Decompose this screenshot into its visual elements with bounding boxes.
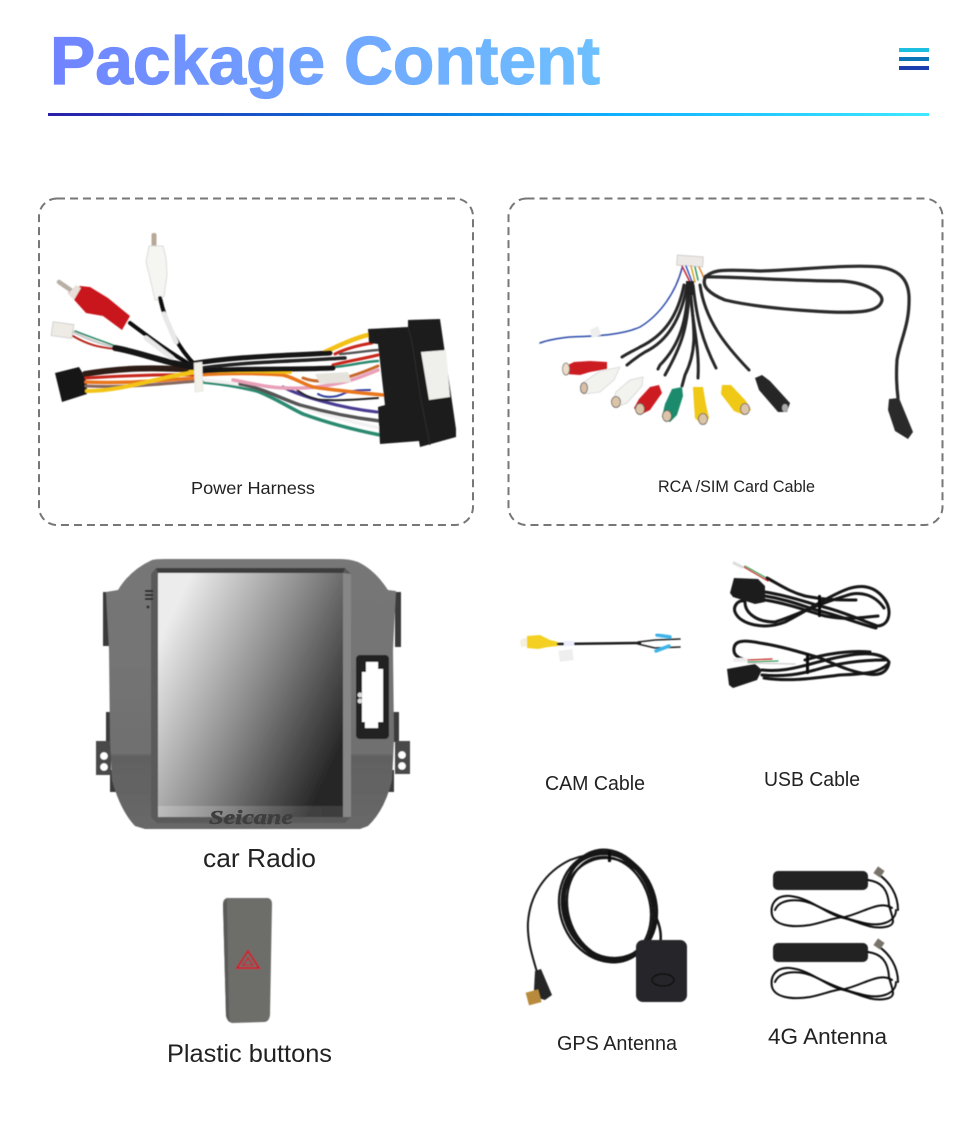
fine wires top: [734, 563, 770, 581]
panel: power harness: [39, 198, 473, 525]
plug white 2: [612, 377, 643, 408]
item: car radio: [96, 559, 410, 873]
mounting tabs: [103, 592, 401, 792]
header rule: [48, 113, 929, 116]
yellow plug: [527, 635, 558, 649]
wires right of tie: [190, 335, 383, 435]
white end: [520, 636, 530, 647]
item: usb cable: [727, 563, 889, 791]
left plug block: [55, 367, 87, 402]
connector label: [421, 350, 450, 400]
right connector: [368, 319, 456, 447]
bottom usb plug: [727, 664, 762, 688]
bottom coil: [734, 641, 889, 680]
caption: Plastic buttons: [167, 1040, 332, 1068]
caption: GPS Antenna: [557, 1033, 678, 1055]
image: hazard button: [223, 898, 272, 1023]
caption: RCA /SIM Card Cable: [658, 478, 815, 496]
side brackets: [96, 741, 410, 775]
image: power harness cable: [51, 233, 456, 447]
plug yellow 2: [721, 385, 751, 415]
plug yellow 1: [693, 387, 709, 425]
caption: USB Cable: [764, 769, 860, 791]
image: gps antenna: [526, 838, 687, 1005]
hazard triangle: [237, 951, 259, 968]
screen frame: [151, 568, 351, 823]
plug white 1: [580, 367, 620, 394]
image: lower 4g antenna: [772, 938, 898, 1000]
antenna puck: [636, 940, 687, 1002]
sma connector: [526, 989, 542, 1005]
screen: [158, 573, 343, 817]
icon: menu: [899, 48, 929, 70]
bezel: [106, 559, 396, 829]
plug red 2: [634, 385, 662, 415]
item: gps antenna: [526, 838, 687, 1055]
speaker grille: [145, 590, 153, 608]
labels: [564, 641, 574, 646]
item: cam cable: [520, 635, 680, 795]
puck logo: [652, 974, 674, 986]
black cables: [622, 285, 749, 386]
wires left of tie: [85, 368, 198, 391]
plug green: [662, 387, 683, 422]
RCA white: [146, 233, 196, 366]
black audio jack: [755, 375, 790, 412]
small white plug: [51, 322, 198, 367]
caption: Power Harness: [191, 478, 315, 498]
plug red 1: [562, 361, 607, 375]
top white connector: [677, 255, 703, 267]
long sim cable: [704, 266, 909, 398]
image: upper 4g antenna: [772, 866, 898, 928]
image: radio unit: [96, 559, 410, 829]
item: 4g antenna: [768, 866, 898, 1049]
brand logo: Seicane: [209, 807, 293, 829]
caption: car Radio: [203, 843, 316, 873]
side cutout: [356, 655, 389, 739]
coil: [544, 838, 672, 976]
white label tape: [315, 372, 351, 384]
fine wires bottom: [735, 659, 795, 664]
panel: rca sim card cable: [508, 198, 942, 525]
top coil: [735, 578, 889, 628]
coil to puck cable: [655, 915, 661, 945]
fine colored wires: [682, 266, 704, 282]
elbow: [534, 969, 552, 1000]
caption: CAM Cable: [545, 773, 645, 795]
blue wire: [540, 268, 682, 343]
title: Package Content: [50, 23, 600, 99]
item: plastic buttons: [167, 898, 332, 1068]
top usb plug: [730, 578, 765, 604]
RCA red: [59, 282, 196, 368]
image: rca and sim cable: [540, 255, 913, 439]
image: camera cable: [520, 635, 680, 662]
sim box: [888, 398, 913, 439]
caption: 4G Antenna: [768, 1024, 888, 1049]
cable tie: [194, 362, 203, 392]
lead wire: [528, 854, 612, 972]
image: usb cables: [727, 563, 889, 688]
cable: [558, 635, 680, 651]
